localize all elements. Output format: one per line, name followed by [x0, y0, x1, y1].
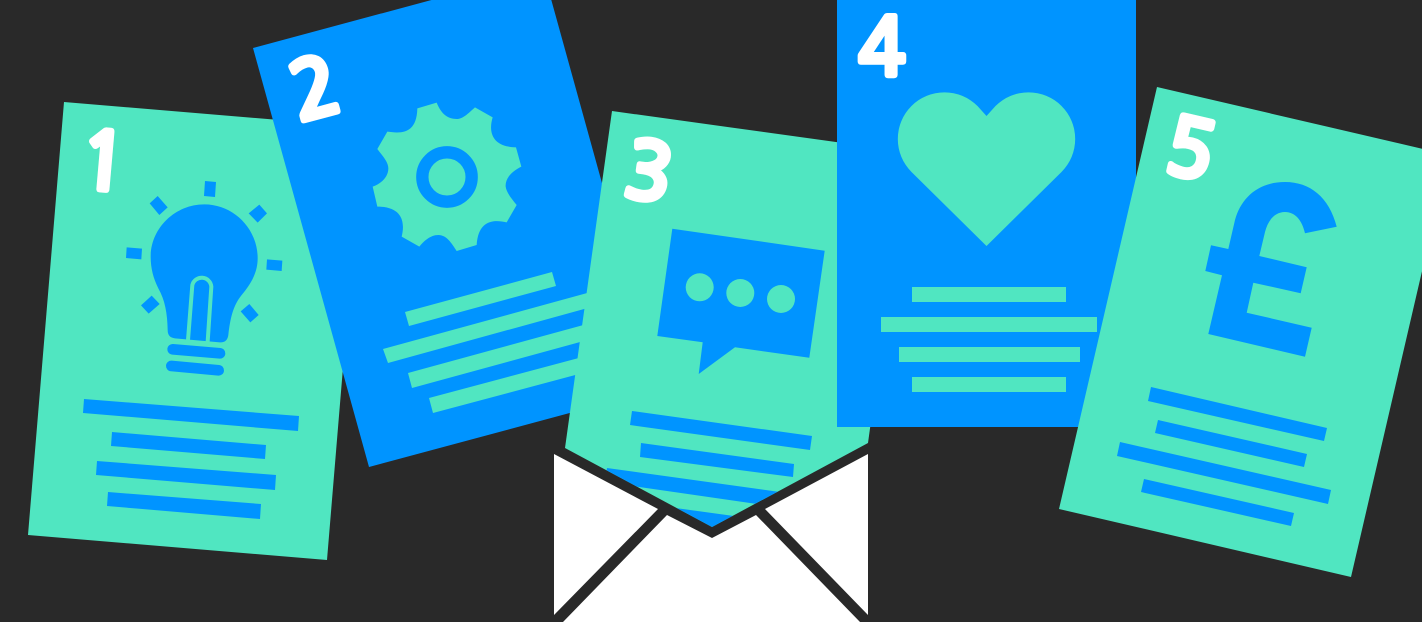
- icon: pound sign: [1205, 182, 1337, 357]
- number 1: 1: [76, 121, 131, 204]
- panel: card 2 settings: [253, 0, 659, 467]
- number 5: 5: [1158, 106, 1223, 194]
- text lines card 4: [881, 287, 1097, 392]
- panel: card 3 message: [565, 111, 870, 527]
- number 4: 4: [858, 9, 906, 88]
- text lines card 1: [83, 399, 299, 519]
- icon: heart: [898, 92, 1075, 246]
- text lines card 3: [605, 411, 812, 536]
- panel: card 4 health: [837, 0, 1136, 427]
- text lines card 2: [383, 272, 624, 413]
- icon: envelope: [554, 454, 868, 622]
- icon: gear: [373, 103, 521, 251]
- icon: speech bubble: [657, 229, 825, 374]
- text lines card 5: [1117, 387, 1331, 526]
- panel: card 1 idea: [28, 102, 363, 560]
- panel: card 5 money: [1059, 87, 1422, 577]
- number 3: 3: [619, 130, 678, 215]
- number 2: 2: [281, 45, 349, 134]
- icon: light bulb: [126, 181, 282, 370]
